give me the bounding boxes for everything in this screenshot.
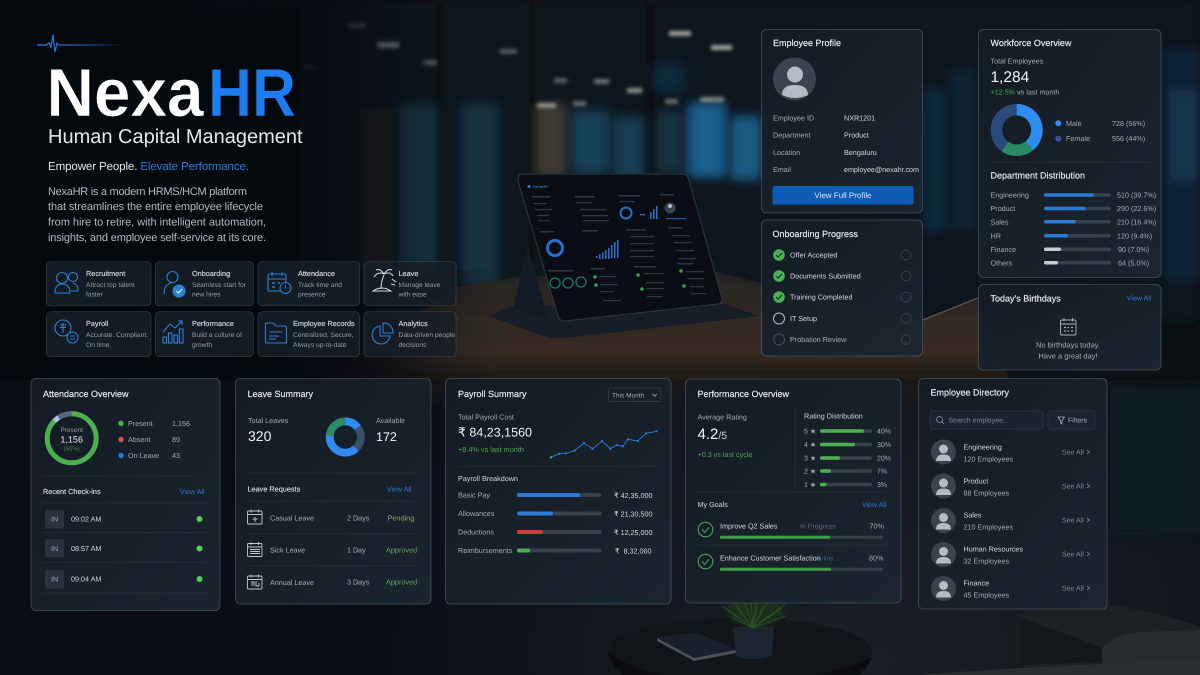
feature card: Payroll [46,312,151,357]
directory row: Sales: See All [1062,516,1084,524]
goal: Q2 sales: In Progress [800,524,836,530]
feature card: Onboarding [155,262,253,306]
feature card: Performance: Build a culture of [192,332,242,339]
payroll row: deductions [458,528,653,537]
legend: 1,156 [172,419,190,428]
tablet screen mini dashboard: NexaHR [533,184,548,189]
feature card: Analytics: Data-driven people [398,332,455,339]
legend [118,419,190,460]
goal: customer satisfaction: Enhance Customer Satisfaction [720,554,821,562]
feature card: Attendance: Attendance [298,269,335,278]
heading: Today's Birthdays [990,294,1061,304]
rating distribution: 40% [877,428,891,436]
heartbeat line [37,35,125,52]
heading: Workforce Overview [990,38,1072,48]
feature card: Onboarding: Seamless start for [192,282,247,289]
feature card: Performance: Performance [192,319,234,328]
heading: Employee Profile [773,38,841,48]
panel: Onboarding Progress [762,220,922,356]
department bars: 64 (5.0%) [1118,258,1149,267]
feature card: Attendance: presence [298,292,326,298]
check-in row [45,510,202,528]
department bars: Others [990,258,1012,267]
stat: average rating: 4.2/5 [698,426,727,443]
description: from hire to retire, with intelligent automation, [48,216,266,228]
check-in row [45,539,202,558]
stat: total leaves [248,416,289,444]
icon: calendar clock [268,272,291,294]
details: Location [773,148,800,157]
description: NexaHR is a modern HRMS/HCM platform [48,186,247,198]
tablet on stand [488,174,759,338]
tablet mat [488,304,759,338]
leave row: casual: Casual Leave [270,514,314,522]
directory row: Finance: Finance [964,578,989,588]
check-in row [45,570,202,588]
rating distribution: 7% [877,468,887,476]
step: Offer Accepted [773,249,911,261]
payroll row: reimbursements: Reimbursements [458,546,513,555]
rating distribution: 5 ★ [804,428,816,436]
description: that streamlines the entire employee lifecycle [48,201,263,213]
directory row: Human Resources: Human Resources [964,544,1023,554]
feature card: Employee Records: Always up-to-date [293,342,347,349]
goal: Q2 sales: Improve Q2 Sales [720,522,778,530]
department bars: Finance [990,245,1016,254]
stat: available: Available [376,416,405,425]
button [772,186,914,204]
step: Documents Submitted [773,270,911,282]
table top [320,272,1010,382]
department bars: 90 (7.0%) [1118,245,1149,254]
icon: coins [55,320,78,343]
feature card: Recruitment: Recruitment [86,269,125,278]
subheading: Payroll Breakdown [458,474,518,483]
check-in row: IN [51,576,58,584]
goal: customer satisfaction [698,554,884,571]
total employees: +12.5% vs last month [990,88,1059,96]
payroll row: basic pay: Basic Pay [458,490,490,500]
legend [1055,119,1145,143]
stat: total payroll [458,412,532,454]
directory row: Product: Product [964,476,988,486]
description: insights, and employee self-service at its core. [48,232,266,244]
title: NexaHR [46,55,296,131]
subheading: Recent Check-ins [43,487,101,496]
feature card: Payroll: Accurate. Compliant. [86,332,148,339]
payroll row: reimbursements: ₹ 8,32,060 [615,546,652,555]
directory row: Human Resources [931,542,1090,567]
goal: customer satisfaction: In-lins [816,556,834,562]
check-in row: IN [51,516,58,524]
payroll row: deductions: Deductions [458,528,494,536]
legend: On Leave [128,451,159,460]
leave row: sick: 1 Day [347,546,366,554]
stat: total payroll: Total Payroll Cost [458,412,514,422]
step: Probation Review: Probation Review [790,335,847,344]
plant pot [733,626,774,659]
message: Have a great day! [1038,352,1098,360]
check-in row: 08:57 AM [71,544,101,553]
goal: customer satisfaction: 80% [869,554,884,562]
feature card: Analytics: Analytics [398,319,428,328]
icon: pie chart [372,323,393,344]
details: employee@nexahr.com [844,165,919,174]
floor [0,380,1200,675]
message: No birthdays today. [1036,340,1100,350]
round table [608,618,872,675]
subtitle: Human Capital Management [48,126,303,148]
search box: Search employee... [948,416,1009,424]
message [1036,340,1100,360]
stat: total leaves: Total Leaves [248,416,289,425]
payroll row: allowances [458,509,653,518]
rating distribution [804,412,891,489]
stat: average rating: Average Rating [698,412,747,422]
step: IT Setup: IT Setup [790,314,817,323]
payroll row: deductions: ₹ 12,25,000 [614,528,653,537]
icon: palm island [373,270,396,291]
sparkline [550,430,658,458]
rating distribution: 20% [877,456,891,462]
leave row: annual: Approved [386,578,417,586]
link: View All [180,488,205,496]
panel: Attendance Overview [31,378,220,610]
icon: folder [265,323,286,343]
legend: Female [1066,134,1090,143]
leave row: annual: Annual Leave [270,578,314,587]
stat: average rating [698,412,752,459]
donut: leave [330,421,361,453]
notebook [657,632,736,658]
feature card: Leave: Manage leave [398,282,441,289]
details: Bengaluru [844,148,877,157]
leave row: annual: 3 Days [347,578,370,586]
donut: attendance: (90%) [64,446,80,452]
leave row: sick: Approved [386,546,417,554]
feature card: Employee Records [258,312,360,357]
icon: growth chart [163,321,183,343]
department bars: 290 (22.6%) [1117,204,1156,213]
details: NXR1201 [844,114,875,122]
feature card: Recruitment [46,262,151,306]
donut: attendance: 1,156 [60,434,83,444]
step: IT Setup [774,313,911,324]
payroll row: reimbursements [458,546,652,555]
title: NexaHR: HR [208,55,296,131]
directory row: Product: See All [1062,482,1084,490]
subheading: My Goals [698,500,728,509]
avatar [773,58,816,100]
department bars: Sales [990,217,1009,226]
feature card: Attendance [258,262,360,306]
details [773,114,919,174]
department bars: Product [990,204,1015,213]
title: NexaHR: Nexa [46,55,205,131]
directory row: Product: 88 Employees [964,488,1009,498]
directory row: Sales: Sales [964,510,982,520]
goal: Q2 sales [698,522,884,539]
dropdown [608,388,661,402]
legend: 89 [172,435,180,444]
icon: calendar [1060,318,1076,335]
directory row: Sales: 210 Employees [964,522,1013,532]
heading: Leave Summary [248,389,314,399]
panel: Performance Overview [686,379,901,603]
heading: Employee Directory [930,388,1010,398]
heading: Attendance Overview [43,389,129,399]
leave row: sick [248,542,417,556]
department bars: 210 (16.4%) [1117,217,1156,226]
feature card: Analytics: decisions [398,342,427,349]
total employees: 1,284 [990,69,1030,86]
legend: Absent [128,435,150,444]
department bars: 510 (39.7%) [1117,190,1156,200]
feature card: Leave: Leave [398,269,418,278]
step: Training Completed: Training Completed [790,292,852,302]
legend: 556 (44%) [1112,134,1145,143]
feature card: Payroll: On time. [86,342,111,349]
panel: Leave Summary [236,378,431,604]
button: View Full Profile [814,191,872,200]
panel: Workforce Overview [978,30,1161,278]
details: Employee ID [773,114,814,122]
department bars: 120 (9.4%) [1117,231,1152,240]
sofa [918,605,1200,675]
payroll row: basic pay [458,490,653,500]
feature card: Leave: with ease [398,292,427,298]
directory row: Sales [931,508,1090,533]
step: Probation Review [774,334,911,345]
directory row: Engineering: 120 Employees [964,454,1013,464]
donut: attendance [47,414,96,463]
panel: Payroll Summary [446,378,671,604]
step: Documents Submitted: Documents Submitted [790,272,861,280]
dropdown: This Month [612,392,645,399]
plant leaves [722,589,788,628]
rating distribution: 1 ★ [804,481,816,489]
details: Email [773,165,791,174]
icon: people [55,272,78,293]
stat: available: 172 [376,430,397,444]
heading: department distribution: Department Distribution [990,170,1085,180]
rating distribution: 2 ★ [804,468,816,476]
stat: available [376,416,405,444]
stat: average rating: +0.3 vs last cycle [698,450,752,459]
directory row: Engineering: See All [1062,448,1084,456]
heading: Payroll Summary [458,389,527,399]
heading: Performance Overview [698,389,790,399]
directory row: Finance: See All [1062,584,1084,592]
donut: attendance: Present [60,427,83,434]
feature card: Recruitment: Attract top talent [86,282,135,289]
step: Training Completed [773,291,911,303]
directory row: Engineering: Engineering [964,442,1002,452]
legend: 728 (56%) [1112,119,1145,128]
feature card: Onboarding: new hires [192,292,221,298]
feature card: Employee Records: Employee Records [293,319,355,328]
department bars [990,190,1156,267]
directory row: Human Resources: 32 Employees [964,556,1009,566]
check-in row: 09:04 AM [71,575,101,584]
search box [930,411,1043,429]
panel: Employee Directory [918,378,1107,609]
feature card: Employee Records: Centralized, Secure, [293,332,354,339]
leave row: casual: Pending [388,514,414,522]
step: Offer Accepted: Offer Accepted [790,250,837,260]
tagline: Empower People. Elevate Performance. [48,160,249,173]
directory row: Engineering [931,440,1090,464]
rating distribution: 3% [877,482,887,489]
tablet screen mini dashboard [528,184,707,301]
rating distribution: 4 ★ [804,441,816,449]
leave row: annual [248,574,417,589]
stat: total payroll: ₹ 84,23,1560 [458,426,532,440]
check-in row: 09:02 AM [71,515,101,524]
department bars: HR [990,231,1001,240]
legend: 43 [172,451,180,460]
feature card: Onboarding: Onboarding [192,269,230,278]
details: Department [773,130,811,140]
feature card: Performance: growth [192,342,212,349]
directory row: Product [931,474,1090,498]
legend: Male [1066,119,1082,128]
donut: gender [996,110,1037,150]
leave row: casual: 2 Days [347,514,370,522]
directory row: Finance [931,576,1090,601]
rating distribution: 30% [877,442,891,449]
filters button: Filters [1068,416,1088,424]
link: View All [862,501,887,509]
tablet kickstand [513,245,548,319]
payroll row: allowances: ₹ 21,30,500 [614,509,653,518]
goal: Q2 sales: 70% [870,522,884,530]
rating distribution: Rating Distribution [804,412,863,420]
feature card: Analytics [364,312,456,357]
feature card: Recruitment: faster [86,292,103,298]
panel: Employee Profile [762,30,922,213]
feature card: Performance [155,312,253,357]
payroll row: allowances: Allowances [458,509,495,518]
panel: Today's Birthdays [978,284,1161,370]
description [48,186,266,244]
check-in row: IN [51,546,58,553]
directory row: Finance: 45 Employees [964,590,1009,600]
feature card: Payroll: Payroll [86,319,109,328]
rating distribution: 3 ★ [804,454,816,462]
details: Product [844,130,869,140]
link: View All [387,486,412,494]
payroll row: basic pay: ₹ 42,35,000 [614,491,653,500]
link: View All [1127,294,1152,302]
feature card: Leave [364,262,456,306]
stat: total leaves: 320 [248,428,272,444]
filters button [1048,411,1095,429]
feature card: Attendance: Track time and [298,282,342,289]
tablet body [518,174,722,321]
total employees: Total Employees [990,56,1044,66]
legend: Present [128,419,153,428]
leave row: casual [248,510,414,524]
heading: Onboarding Progress [772,229,859,239]
subheading: Leave Requests [248,484,301,494]
total employees [990,56,1059,96]
department bars: Engineering [990,190,1029,200]
stat: total payroll: +8.4% vs last month [458,445,524,454]
directory row: Human Resources: See All [1062,550,1084,558]
icon: person with badge [164,272,185,297]
leave row: sick: Sick Leave [270,546,305,554]
